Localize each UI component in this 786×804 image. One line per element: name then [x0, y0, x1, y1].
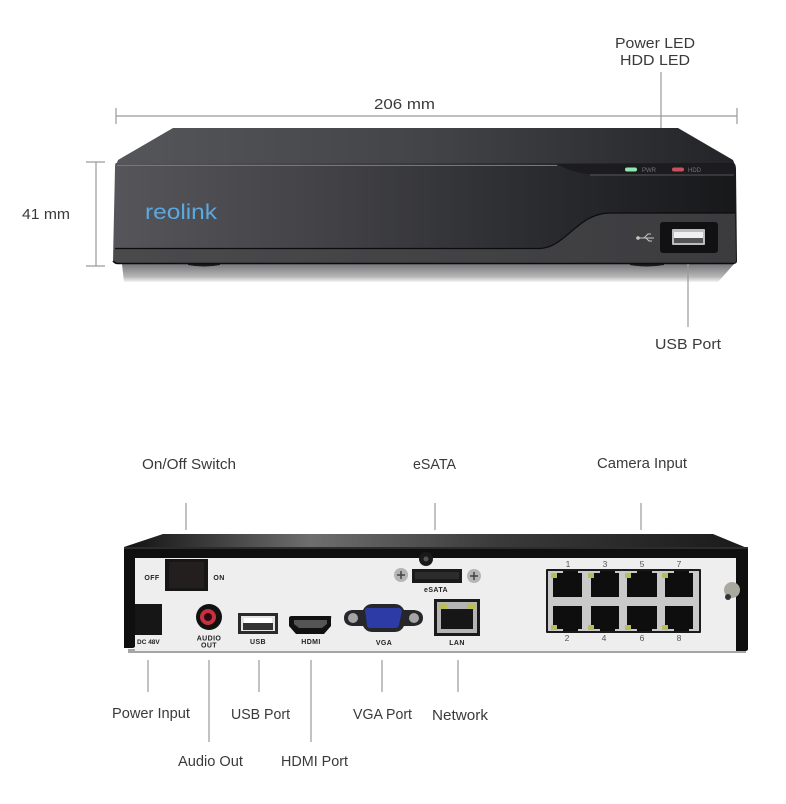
leader line: USB Port	[687, 264, 689, 327]
height dimension: 41 mm	[22, 162, 105, 266]
front face	[113, 163, 737, 264]
label: Camera Input: Camera Input	[597, 456, 687, 472]
label: eSATA: eSATA	[413, 457, 456, 473]
label: Audio Out: Audio Out	[178, 754, 243, 770]
port numbers: 1	[566, 559, 571, 569]
lan port: LAN	[449, 640, 465, 647]
label: HDD LED: HDD LED	[620, 53, 690, 69]
height dimension: 41 mm: 41 mm	[22, 207, 70, 223]
link LEDs	[551, 573, 668, 630]
rear panel	[135, 556, 736, 651]
shadow	[122, 264, 734, 282]
power input	[135, 604, 162, 646]
vga port	[344, 604, 423, 647]
switch: ON	[213, 575, 225, 582]
width dimension: 206 mm	[116, 97, 737, 124]
label: USB Port top: USB Port	[655, 337, 721, 353]
front view of recorder	[113, 128, 737, 282]
width dimension: 206 mm: 206 mm	[374, 97, 435, 113]
lan port	[434, 599, 480, 647]
switch: OFF	[144, 575, 160, 582]
port numbers: 3	[603, 559, 608, 569]
LED strip	[557, 164, 735, 174]
vga port: VGA	[376, 640, 392, 647]
power input: DC 48V	[137, 639, 160, 646]
usb port: USB	[250, 639, 266, 646]
lower band	[114, 213, 736, 263]
rear shadow	[128, 649, 746, 653]
port numbers: 8	[677, 633, 682, 643]
label: USB Port rear: USB Port	[231, 707, 290, 723]
feet	[188, 263, 664, 266]
hdmi port	[289, 616, 331, 646]
reolink logo: reolink	[145, 201, 218, 224]
port row bottom	[553, 606, 693, 631]
label: Power LED: Power LED	[615, 36, 695, 52]
port row top	[553, 571, 693, 597]
rear frame	[124, 547, 748, 651]
power LED	[625, 168, 657, 174]
switch	[144, 559, 225, 591]
front USB port	[660, 222, 718, 253]
esata port	[394, 552, 481, 594]
label: On/Off Switch: On/Off Switch	[142, 457, 236, 473]
HDD LED	[672, 168, 702, 174]
leader line: LEDs	[660, 72, 662, 128]
label: VGA Port: VGA Port	[353, 707, 412, 723]
port numbers: 6	[640, 633, 645, 643]
port numbers: 4	[602, 633, 607, 643]
label: Power Input: Power Input	[112, 706, 190, 722]
leader line: top row	[186, 503, 641, 530]
audio out: OUT	[201, 642, 217, 650]
hdmi port: HDMI	[301, 639, 321, 646]
label: Network: Network	[432, 708, 489, 724]
audio out	[196, 604, 222, 650]
label: HDMI Port: HDMI Port	[281, 754, 348, 770]
rear top surface	[124, 534, 747, 550]
port numbers: 2	[565, 633, 570, 643]
USB symbol	[637, 234, 654, 241]
top surface	[116, 128, 735, 165]
usb port	[238, 613, 278, 646]
rear view of recorder	[124, 534, 748, 653]
port numbers: 5	[640, 559, 645, 569]
audio out: AUDIO	[197, 636, 221, 642]
port numbers: 7	[677, 559, 682, 569]
thumb screw	[724, 582, 740, 600]
power LED: PWR	[642, 168, 657, 174]
camera input ports	[546, 559, 701, 643]
HDD LED: HDD	[688, 168, 702, 174]
leader lines: bottom row	[148, 660, 458, 742]
esata port: eSATA	[424, 587, 448, 594]
port numbers	[565, 559, 682, 643]
